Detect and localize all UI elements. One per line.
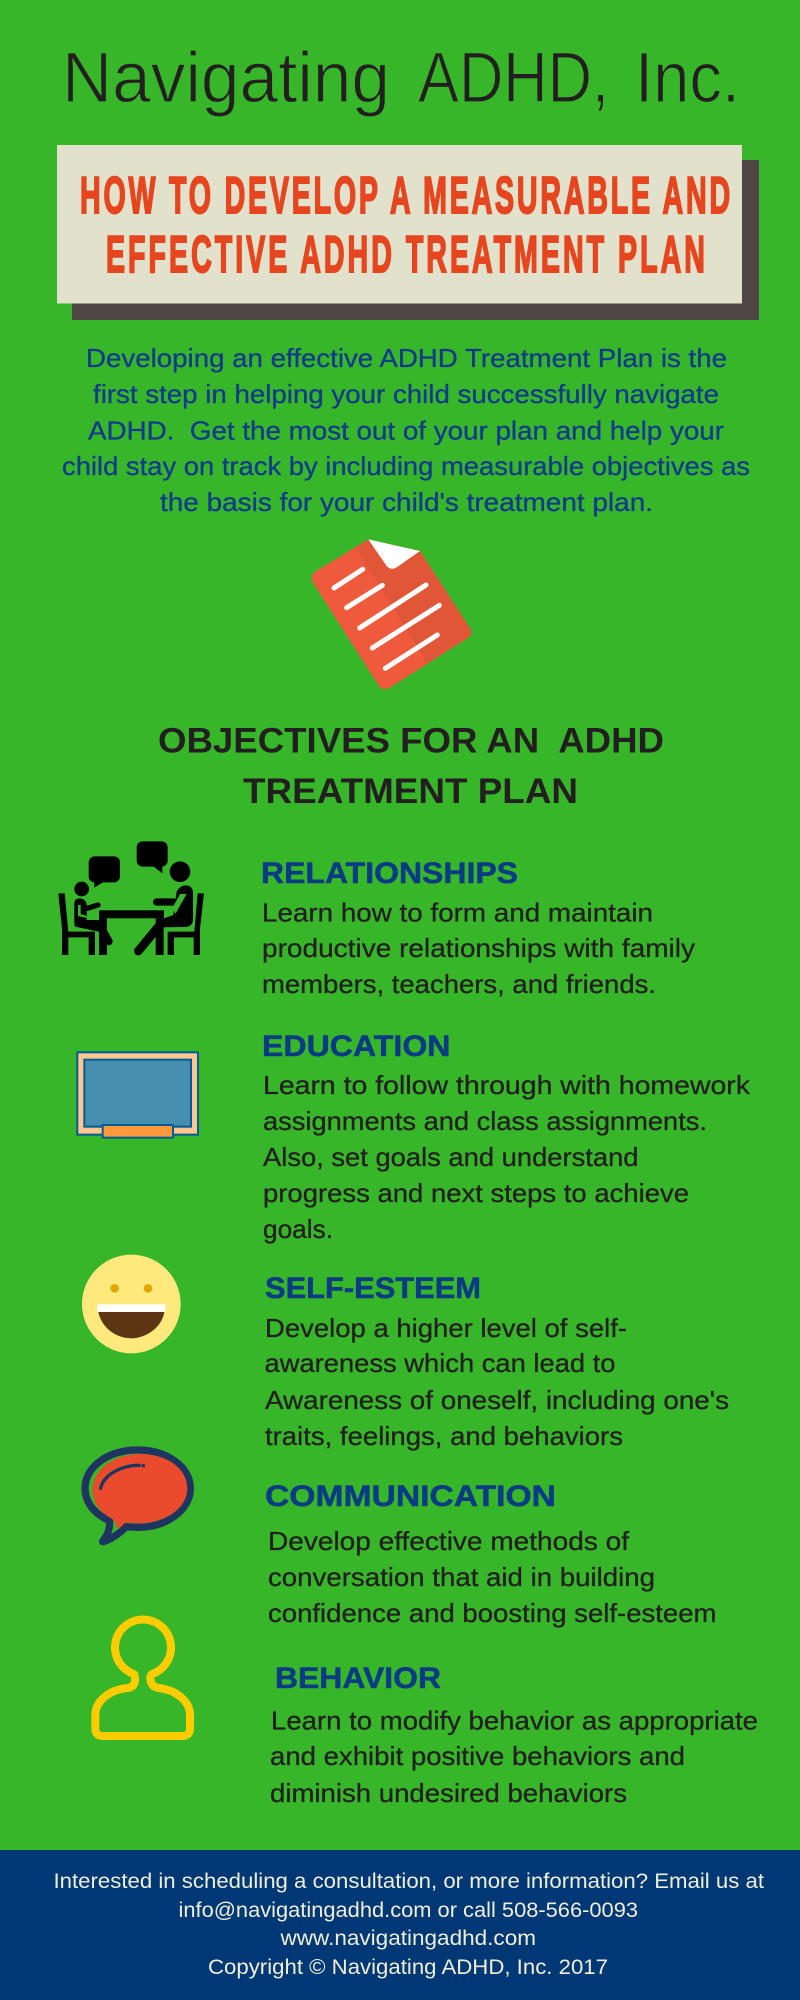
footer text: info@navigatingadhd.com or call 508-566-0093 xyxy=(178,1899,638,1922)
text: communication: confidence and boosting self-esteem xyxy=(268,1598,716,1628)
title xyxy=(62,39,740,118)
intro text: child stay on track by including measurable objectives as xyxy=(62,451,750,481)
footer band xyxy=(0,1850,800,2000)
objective: behavior xyxy=(270,1662,758,1808)
icon: people talking at table xyxy=(58,841,204,955)
banner heading xyxy=(80,166,730,283)
text: education: Also, set goals and understand xyxy=(263,1142,638,1172)
text: self-esteem: Develop a higher level of self- xyxy=(265,1313,627,1343)
objective: communication xyxy=(265,1480,716,1628)
text: education: Learn to follow through with homework xyxy=(263,1070,751,1100)
title: Inc. xyxy=(635,39,740,118)
banner heading: HOW TO DEVELOP A MEASURABLE AND xyxy=(80,166,730,224)
heading: education: EDUCATION xyxy=(262,1030,450,1063)
objectives heading xyxy=(158,722,664,811)
footer text: Copyright © Navigating ADHD, Inc. 2017 xyxy=(208,1956,608,1979)
text: behavior: and exhibit positive behaviors and xyxy=(270,1741,685,1771)
text: relationships xyxy=(262,898,695,999)
heading: relationships: RELATIONSHIPS xyxy=(261,857,518,890)
text: education: goals. xyxy=(263,1214,333,1244)
banner shadow xyxy=(72,160,759,320)
text: education: progress and next steps to achieve xyxy=(263,1178,689,1208)
title: ADHD, xyxy=(418,39,609,118)
text: relationships: members, teachers, and friends. xyxy=(262,969,656,999)
objective: relationships xyxy=(261,857,695,999)
text: self-esteem xyxy=(264,1313,729,1451)
text: self-esteem: awareness which can lead to xyxy=(264,1348,616,1378)
text: education: assignments and class assignments. xyxy=(263,1106,707,1136)
objectives heading: TREATMENT PLAN xyxy=(243,772,578,811)
objectives heading: OBJECTIVES FOR AN ADHD xyxy=(158,722,664,760)
heading: behavior: BEHAVIOR xyxy=(275,1662,441,1695)
text: relationships: productive relationships with family xyxy=(262,933,695,963)
text: self-esteem: Awareness of oneself, including one's xyxy=(265,1385,729,1415)
objective: education xyxy=(262,1030,751,1244)
footer text xyxy=(54,1870,764,1979)
intro text: the basis for your child's treatment plan. xyxy=(160,487,653,517)
icon: speech bubble xyxy=(85,1450,190,1542)
text: communication: Develop effective methods of xyxy=(268,1526,630,1556)
text: behavior: diminish undesired behaviors xyxy=(270,1778,627,1808)
icon: document xyxy=(312,539,471,689)
title: Navigating xyxy=(62,39,390,118)
footer text: www.navigatingadhd.com xyxy=(279,1927,536,1950)
icon: person outline xyxy=(95,1619,190,1736)
heading: communication: COMMUNICATION xyxy=(265,1480,556,1513)
intro text xyxy=(62,343,750,517)
footer xyxy=(0,1850,800,2000)
objective: self-esteem xyxy=(264,1272,729,1451)
intro text: ADHD. Get the most out of your plan and help your xyxy=(88,416,724,446)
text: education xyxy=(263,1070,751,1244)
heading: self-esteem: SELF-ESTEEM xyxy=(265,1272,481,1305)
text: self-esteem: traits, feelings, and behaviors xyxy=(265,1421,623,1451)
text: relationships: Learn how to form and maintain xyxy=(262,898,653,928)
text: behavior xyxy=(270,1706,758,1808)
text: behavior: Learn to modify behavior as appropriate xyxy=(271,1706,758,1736)
banner heading: EFFECTIVE ADHD TREATMENT PLAN xyxy=(106,225,705,283)
text: communication: conversation that aid in building xyxy=(268,1562,655,1592)
footer text: Interested in scheduling a consultation, or more information? Email us at xyxy=(54,1870,764,1893)
icon: chalkboard xyxy=(77,1052,198,1138)
intro text: Developing an effective ADHD Treatment Plan is the xyxy=(86,343,727,373)
intro text: first step in helping your child successfully navigate xyxy=(93,379,719,409)
banner xyxy=(57,145,759,320)
icon: smiley face xyxy=(82,1255,181,1353)
text: communication xyxy=(268,1526,716,1628)
banner panel xyxy=(57,145,742,304)
